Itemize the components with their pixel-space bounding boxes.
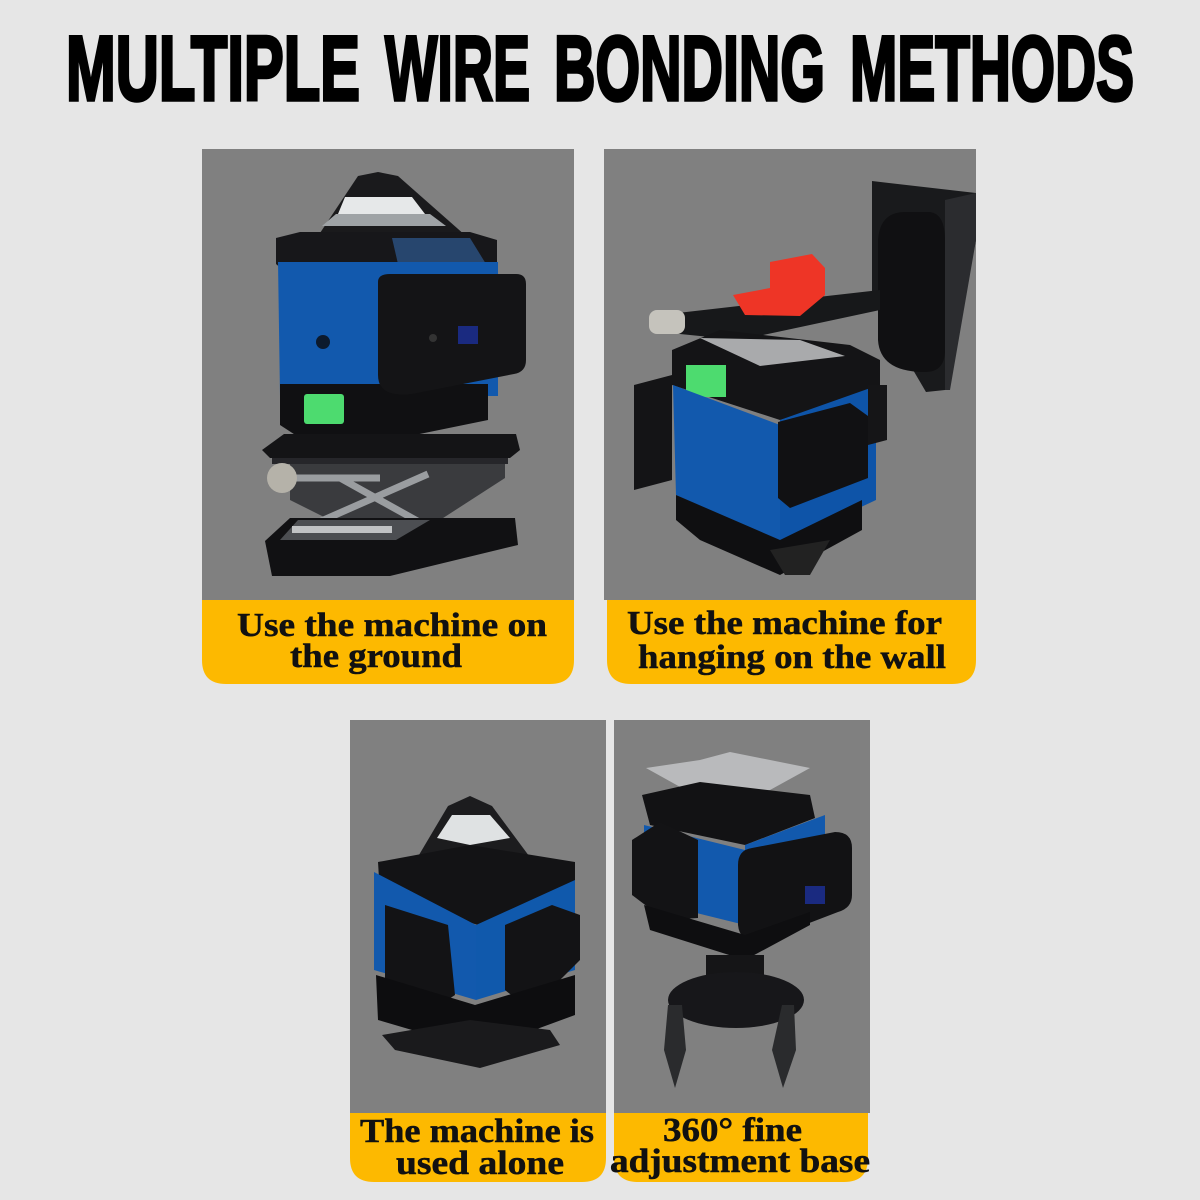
panel: wall hanging xyxy=(604,149,976,684)
caption background: alone xyxy=(350,1113,606,1182)
panel: used alone xyxy=(350,720,606,1182)
panel: ground use xyxy=(202,149,574,684)
caption: wall xyxy=(627,605,946,676)
illustration: laser level on tripod base xyxy=(632,752,852,1088)
title: MULTIPLE xyxy=(66,18,360,120)
illustration: laser level alone xyxy=(374,796,580,1068)
caption: alone: used alone xyxy=(396,1145,564,1182)
caption: ground: Use the machine on xyxy=(237,607,547,644)
caption: wall: Use the machine for xyxy=(627,605,942,642)
caption: alone xyxy=(360,1113,594,1182)
caption: base xyxy=(610,1112,870,1180)
caption: wall: hanging on the wall xyxy=(638,639,946,676)
caption: base: adjustment base xyxy=(610,1143,870,1180)
title xyxy=(66,18,1134,120)
title: WIRE xyxy=(385,18,530,120)
caption: base: 360° fine xyxy=(663,1112,802,1149)
caption background: wall xyxy=(607,600,976,684)
caption: ground xyxy=(237,607,547,675)
caption background: ground xyxy=(202,600,574,684)
caption: ground: the ground xyxy=(290,638,462,675)
illustration: laser level on scissor lift xyxy=(262,172,526,576)
caption: alone: The machine is xyxy=(360,1113,594,1150)
title: BONDING xyxy=(554,18,825,120)
illustration: laser level on wall mount xyxy=(634,181,976,575)
caption background: base xyxy=(614,1113,868,1182)
panel: fine adjustment base xyxy=(610,720,870,1182)
